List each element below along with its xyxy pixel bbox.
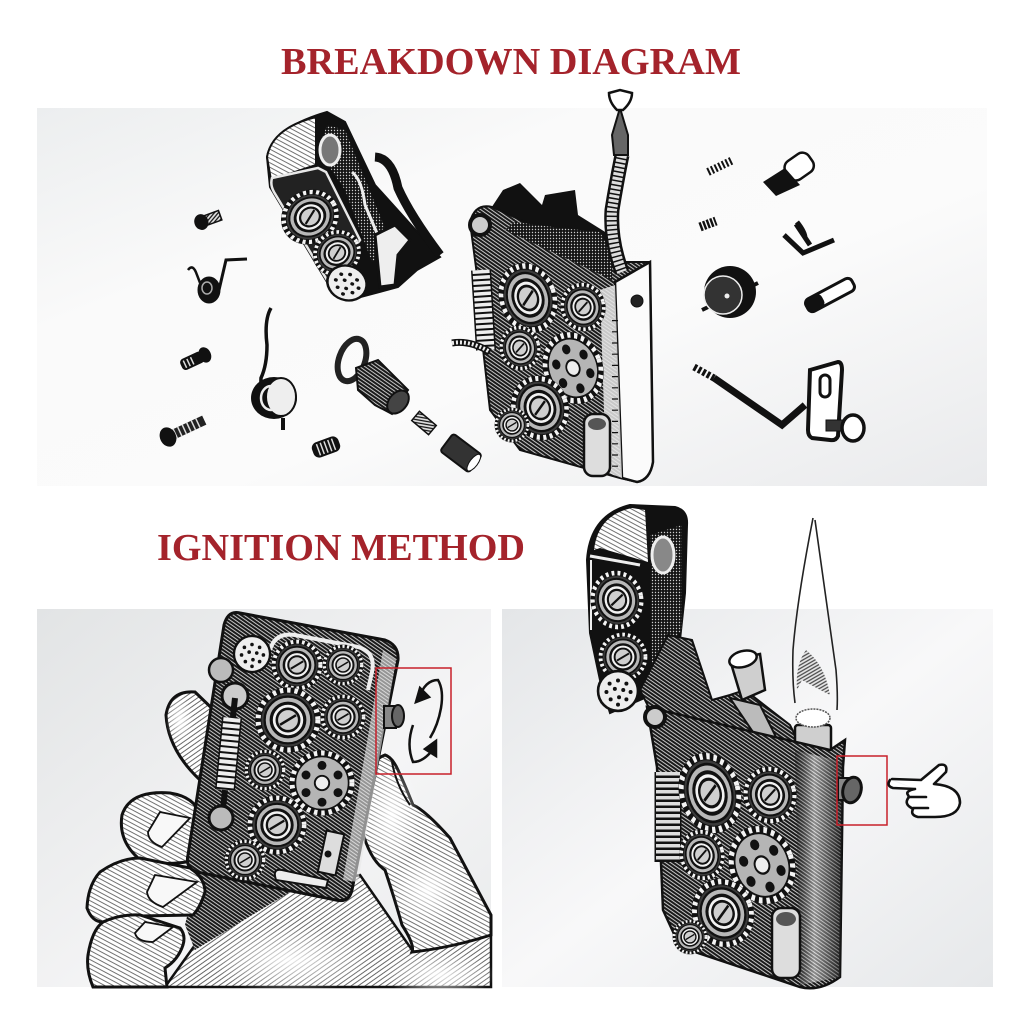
icon: gear spindle [702, 266, 758, 318]
icon: tiny spring [700, 221, 716, 227]
icon: lid assembly [267, 112, 440, 306]
icon: index finger top [166, 692, 224, 780]
icon: spring with wheel [251, 308, 297, 430]
icon: small cylinder [412, 411, 436, 435]
icon: finger 2 [121, 793, 200, 864]
icon: pointing hand [889, 765, 960, 817]
panel: breakdown background [37, 108, 987, 486]
icon: grub screw [310, 435, 342, 459]
callout: right red box [837, 756, 887, 825]
icon: screw middle left [178, 345, 214, 373]
icon: side button [838, 775, 864, 805]
icon: thumb [361, 755, 491, 952]
illustration: hand holding lighter [87, 612, 495, 999]
illustration: open lighter with flame [586, 505, 864, 988]
icon: side button [384, 705, 404, 728]
icon: plate and knob [808, 362, 864, 441]
icon: small spring top right [708, 160, 733, 172]
icon: open lid [586, 505, 687, 713]
arrow: rotation arrows [410, 680, 442, 762]
icon: inner mechanism [640, 635, 831, 757]
icon: long screw [157, 411, 208, 449]
icon: finger 3 [87, 858, 205, 922]
icon: lever spring [694, 367, 805, 425]
icon: flint cap top right [763, 150, 817, 196]
icon: torsion spring left [188, 259, 247, 303]
icon: small screw top left [192, 208, 223, 232]
icon: wick [609, 90, 632, 272]
title: breakdown diagram: BREAKDOWN DIAGRAM [281, 41, 741, 83]
icon: cap [440, 433, 484, 474]
icon: lighter body [645, 707, 845, 988]
icon: flint tube with ring [332, 335, 413, 418]
icon: palm [165, 875, 491, 987]
icon: flame [793, 518, 837, 710]
panel: ignition right background [502, 609, 993, 987]
icon: clip [784, 222, 834, 253]
icon: lighter front [187, 612, 398, 901]
icon: shadow between fingers and palm [185, 870, 290, 950]
icon: pin [804, 277, 856, 313]
icon: exploded lighter body [452, 183, 653, 482]
panel: ignition left background [37, 609, 491, 987]
icon: finger 4 [88, 915, 184, 987]
callout: left red box [376, 668, 451, 774]
title: ignition method: IGNITION METHOD [157, 527, 525, 569]
